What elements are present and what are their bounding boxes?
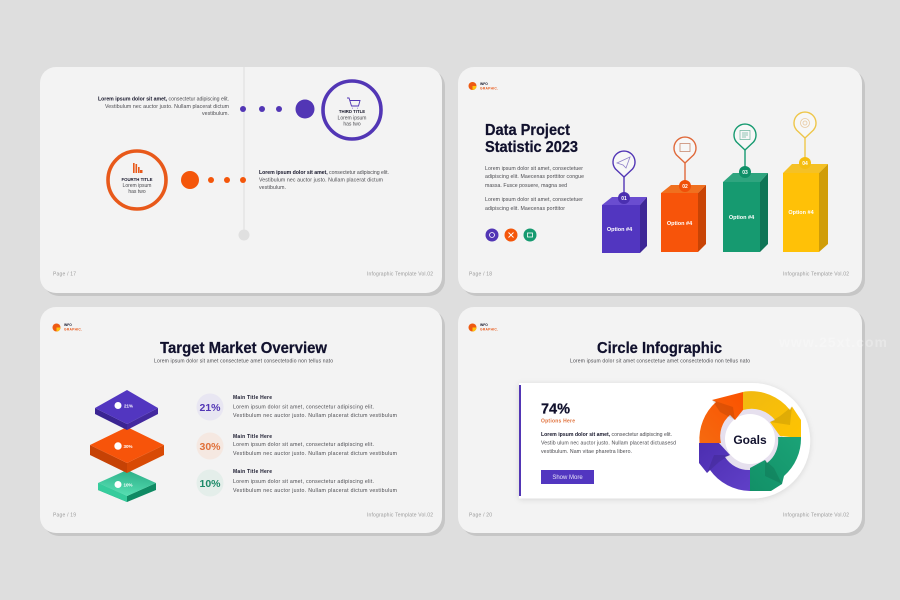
- text block: item 2: Lorem ipsum dolor sit amet, consectetur adipiscing elit.: [233, 442, 374, 448]
- segment: green arrow: [750, 437, 801, 491]
- layer: purple 21%: 21%: [124, 403, 133, 408]
- chart: goals cycle ring: [699, 391, 801, 491]
- circle: fourth title: [108, 151, 166, 209]
- text block: item 3: Lorem ipsum dolor sit amet, consectetur adipiscing elit.: [233, 479, 374, 485]
- heading: Circle Infographic: [597, 340, 722, 357]
- text block: Vestib ulum nec auctor justo. Nullam placerat dictuasesd: [541, 440, 676, 446]
- label: goals: Goals: [733, 433, 767, 447]
- text block: fourth item: Lorem ipsum dolor sit amet, consectetur adipiscing elit.: [259, 170, 389, 176]
- heading: Statistic 2023: [485, 139, 578, 156]
- bar: option 3 green: Option #4: [729, 215, 755, 221]
- segment: purple arrow: [699, 443, 750, 491]
- text block: item 1: Vestibulum nec auctor justo. Nullam placerat dictum vestibulum: [233, 413, 397, 419]
- text block: item 2: Vestibulum nec auctor justo. Nullam placerat dictum vestibulum: [233, 451, 397, 457]
- badge: 10%: 10%: [199, 478, 221, 490]
- footer: page number: Page / 17: [53, 272, 76, 278]
- layer: green 10%: 10%: [124, 482, 133, 487]
- text block: item 2: Main Title Here: [233, 434, 272, 440]
- panel: data project statistic: [458, 67, 865, 296]
- heading: Data Project: [485, 122, 571, 139]
- circle: third title: THIRD TITLE: [339, 109, 365, 114]
- bar: option 4 yellow: Option #4: [788, 210, 815, 216]
- footer: template name: Infographic Template Vol.02: [783, 272, 849, 278]
- text block: item 1: Lorem ipsum dolor sit amet, consectetur adipiscing elit.: [233, 404, 374, 410]
- badge: 10%: [196, 470, 224, 496]
- bar: option 2 orange: [661, 137, 706, 252]
- text block: item 2: [233, 434, 397, 457]
- watermark: www.25xt.com: [778, 334, 887, 350]
- logo: INFO: [480, 82, 488, 86]
- text block: third item: vestibulum.: [202, 111, 229, 117]
- icon: shopping cart: [347, 98, 360, 108]
- text block: description: adipiscing elit. Maecenas porttitor congue: [485, 174, 584, 180]
- layer: purple 21%: [95, 390, 158, 430]
- footer: page number: Page / 18: [469, 272, 492, 278]
- connector dots: purple: [240, 100, 314, 118]
- text block: description: adipiscing elit. Maecenas porttitor: [485, 206, 565, 212]
- logo: INFO: [480, 323, 488, 327]
- subtitle: Lorem ipsum dolor sit amet consectetue amet consectetodio non tellus nato: [154, 358, 333, 364]
- text block: fourth item: vestibulum.: [259, 185, 286, 191]
- text block: fourth item: Vestibulum nec auctor justo. Nullam placerat dictum: [259, 178, 383, 184]
- text block: description: Lorem ipsum dolor sit amet, consectetuer: [485, 166, 583, 172]
- footer: page number: Page / 20: [469, 512, 492, 518]
- circle: fourth title: FOURTH TITLE: [121, 177, 153, 182]
- layer: orange 30%: [90, 427, 164, 473]
- segment: orange arrow: [699, 392, 743, 443]
- logo: [468, 82, 498, 90]
- bar: option 4 yellow: [783, 112, 828, 252]
- pin 4: 04: [802, 161, 808, 167]
- circle: fourth title: Lorem ipsum: [123, 183, 151, 189]
- logo: [468, 323, 498, 332]
- bar: option 1 purple: [602, 151, 647, 253]
- text block: third item: Lorem ipsum dolor sit amet, consectetur adipiscing elit.: [98, 96, 229, 102]
- circle: third title: has two: [343, 122, 361, 128]
- logo: GRAPHIC.: [64, 328, 82, 332]
- text block: description: Lorem ipsum dolor sit amet, consectetuer: [485, 197, 583, 203]
- heading: [485, 122, 578, 156]
- badge: 21%: 21%: [199, 402, 221, 414]
- logo: GRAPHIC.: [480, 86, 498, 90]
- pin 3: 03: [742, 170, 748, 176]
- text block: third item: [98, 96, 229, 117]
- footer: template name: Infographic Template Vol.02: [367, 512, 433, 518]
- text block: [541, 432, 676, 455]
- button: Show More: [552, 475, 583, 481]
- text block: item 1: Main Title Here: [233, 395, 272, 401]
- badge: 21%: [196, 394, 224, 420]
- text block: vestibulum. Nam vitae pharetra libero.: [541, 449, 632, 455]
- bar: option 1 purple: Option #4: [607, 227, 633, 233]
- text block: fourth item: [259, 170, 389, 191]
- footer: page number: Page / 19: [53, 512, 76, 518]
- icon row: [486, 228, 536, 242]
- badge: 30%: [196, 432, 224, 460]
- arrow shading: [707, 400, 792, 484]
- logo: GRAPHIC.: [480, 328, 498, 332]
- text block: Lorem ipsum dolor sit amet, consectetur adipiscing elit.: [541, 432, 672, 438]
- heading: Target Market Overview: [160, 340, 328, 357]
- badge: 30%: 30%: [199, 441, 221, 453]
- text block: item 3: Vestibulum nec auctor justo. Nullam placerat dictum vestibulum: [233, 488, 397, 494]
- icon: bar chart: [133, 163, 142, 173]
- text block: third item: Vestibulum nec auctor justo. Nullam placerat dictum: [105, 104, 229, 110]
- pin 2: 02: [682, 184, 688, 190]
- panel: timeline slide: [40, 67, 445, 296]
- stat: 74%: [541, 400, 570, 418]
- bar: option 3 green: [723, 124, 768, 252]
- layer: orange 30%: 30%: [124, 444, 133, 449]
- card: [519, 383, 810, 498]
- text block: item 1: [233, 395, 397, 419]
- footer: template name: Infographic Template Vol.02: [783, 512, 849, 518]
- logo: [52, 323, 82, 332]
- layer: green 10%: [98, 470, 156, 502]
- timeline end marker: [238, 230, 250, 240]
- segment: yellow arrow: [743, 391, 801, 438]
- text block: item 3: [233, 469, 397, 494]
- stat label: Options Here: [541, 418, 575, 424]
- bar: option 2 orange: Option #4: [667, 221, 693, 227]
- panel: circle infographic: [458, 307, 865, 536]
- circle: third title: [323, 81, 381, 139]
- logo: INFO: [64, 323, 72, 327]
- pin 1: 01: [621, 196, 627, 202]
- text block: description: [485, 166, 584, 212]
- panel: target market overview: [40, 307, 445, 536]
- footer: template name: Infographic Template Vol.02: [367, 272, 433, 278]
- circle: third title: Lorem ipsum: [338, 116, 366, 122]
- text block: item 3: Main Title Here: [233, 469, 272, 475]
- connector dots: orange: [181, 171, 246, 189]
- text block: description: massa. Fusce posuere, magna sed: [485, 183, 567, 189]
- button: [541, 470, 594, 484]
- subtitle: Lorem ipsum dolor sit amet consectetue amet consectetodio non tellus nato: [570, 358, 750, 364]
- circle: fourth title: has two: [128, 189, 146, 195]
